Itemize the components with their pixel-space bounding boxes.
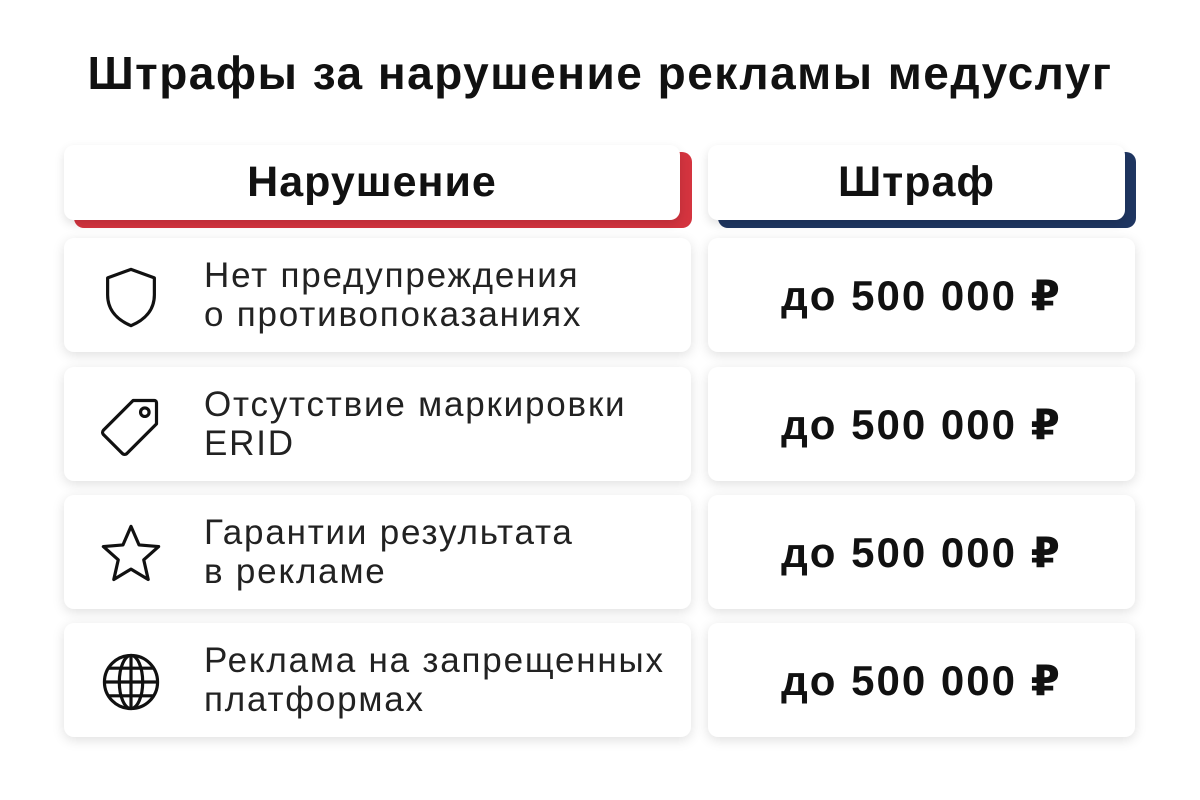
header: violation: Нарушение [247,158,497,206]
text: о противопоказаниях [204,295,582,334]
row 4 violation [64,623,691,737]
row 4 fine [708,623,1135,737]
row 4 fine: до 500 000 ₽ [781,656,1062,704]
text: Гарантии результата [204,513,574,552]
text [204,641,665,719]
text: платформах [204,680,425,719]
row 1 violation [64,238,691,352]
text: Реклама на запрещенных [204,641,665,680]
row 3 fine [708,495,1135,609]
text [204,256,582,334]
text: в рекламе [204,552,387,591]
row 3 violation [64,495,691,609]
text: ERID [204,424,295,463]
text [204,385,626,463]
icon: shield [106,268,156,328]
row 2 violation [64,367,691,481]
icon: globe [102,654,160,710]
header: fine: Штраф [838,158,995,206]
title: Штрафы за нарушение рекламы медуслуг [87,47,1113,99]
row 3 fine: до 500 000 ₽ [781,528,1062,576]
row 1 fine: до 500 000 ₽ [781,272,1062,318]
icon: star [102,524,160,582]
row 2 fine [708,367,1135,481]
row 1 fine [708,238,1135,352]
text: Нет предупреждения [204,256,579,295]
icon: tag [101,398,158,456]
header: fine [705,152,1136,228]
row 2 fine: до 500 000 ₽ [781,400,1062,448]
text [204,513,574,591]
text: Отсутствие маркировки [204,385,626,424]
header: violation [61,152,692,228]
